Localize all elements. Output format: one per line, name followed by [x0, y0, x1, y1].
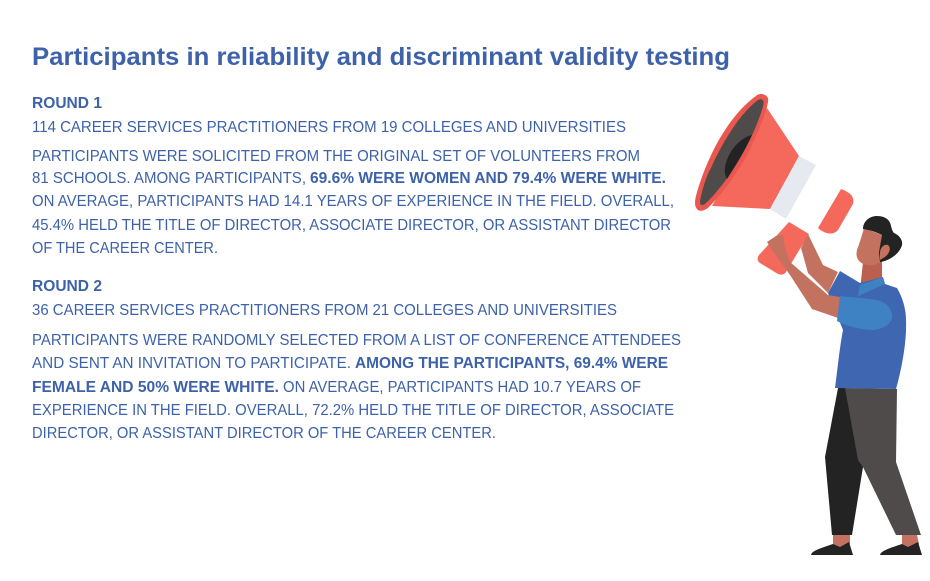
text block: round 1: [32, 95, 674, 257]
figure: person: [767, 216, 922, 555]
paragraph: round 1: 81 SCHOOLS. AMONG PARTICIPANTS,: [32, 170, 306, 187]
ear: [880, 245, 890, 260]
head: [856, 228, 882, 265]
neck: [860, 258, 882, 290]
paragraph: round 1: PARTICIPANTS WERE SOLICITED FROM THE ORIGINAL SET OF VOLUNTEERS FROM: [32, 148, 640, 165]
paragraph: round 2: AND SENT AN INVITATION TO PARTICIPATE.: [32, 355, 351, 372]
summary: round 2: 36 CAREER SERVICES PRACTITIONERS FROM 21 COLLEGES AND UNIVERSITIES: [32, 302, 617, 319]
shirt: [828, 271, 906, 389]
paragraph: round 2: AMONG THE PARTICIPANTS, 69.4% WERE: [355, 355, 668, 372]
heading: round 2: ROUND 2: [32, 278, 102, 295]
summary: round 1: 114 CAREER SERVICES PRACTITIONERS FROM 19 COLLEGES AND UNIVERSITIES: [32, 119, 626, 136]
paragraph: round 2: [32, 332, 681, 442]
feet: [833, 535, 850, 548]
paragraph: round 2: ON AVERAGE, PARTICIPANTS HAD 10.7 YEARS OF: [283, 379, 641, 396]
heading: round 1: ROUND 1: [32, 95, 102, 112]
sleeve: [837, 296, 892, 330]
paragraph: round 1: ON AVERAGE, PARTICIPANTS HAD 14.1 YEARS OF EXPERIENCE IN THE FIELD. OVERALL,: [32, 193, 674, 210]
paragraph: round 1: 69.6% WERE WOMEN AND 79.4% WERE WHITE.: [310, 170, 666, 187]
paragraph: round 1: 45.4% HELD THE TITLE OF DIRECTOR, ASSOCIATE DIRECTOR, OR ASSISTANT DIRECTOR: [32, 217, 671, 234]
paragraph: round 2: EXPERIENCE IN THE FIELD. OVERALL, 72.2% HELD THE TITLE OF DIRECTOR, ASSOCIATE: [32, 402, 674, 419]
paragraph: round 2: DIRECTOR, OR ASSISTANT DIRECTOR OF THE CAREER CENTER.: [32, 425, 496, 442]
icon: megaphone: [695, 94, 853, 275]
illustration: person with megaphone: [695, 94, 922, 555]
paragraph: round 1: OF THE CAREER CENTER.: [32, 240, 218, 257]
title: Participants in reliability and discriminant validity testing: [32, 43, 730, 71]
paragraph: round 2: FEMALE AND 50% WERE WHITE.: [32, 379, 279, 396]
near arm: [767, 235, 840, 318]
paragraph: round 2: PARTICIPANTS WERE RANDOMLY SELECTED FROM A LIST OF CONFERENCE ATTENDEES: [32, 332, 681, 349]
text block: round 2: [32, 278, 681, 442]
far arm: [801, 234, 838, 293]
paragraph: round 1: [32, 148, 674, 257]
legs: [825, 388, 863, 535]
hair: [863, 216, 902, 262]
